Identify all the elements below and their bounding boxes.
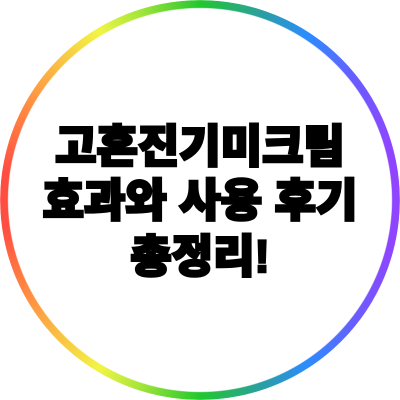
title line 3: 총정리!	[130, 231, 270, 282]
title line 1: 고혼진기미크림	[55, 121, 345, 172]
title line 2: 효과와 사용 후기	[43, 175, 357, 226]
